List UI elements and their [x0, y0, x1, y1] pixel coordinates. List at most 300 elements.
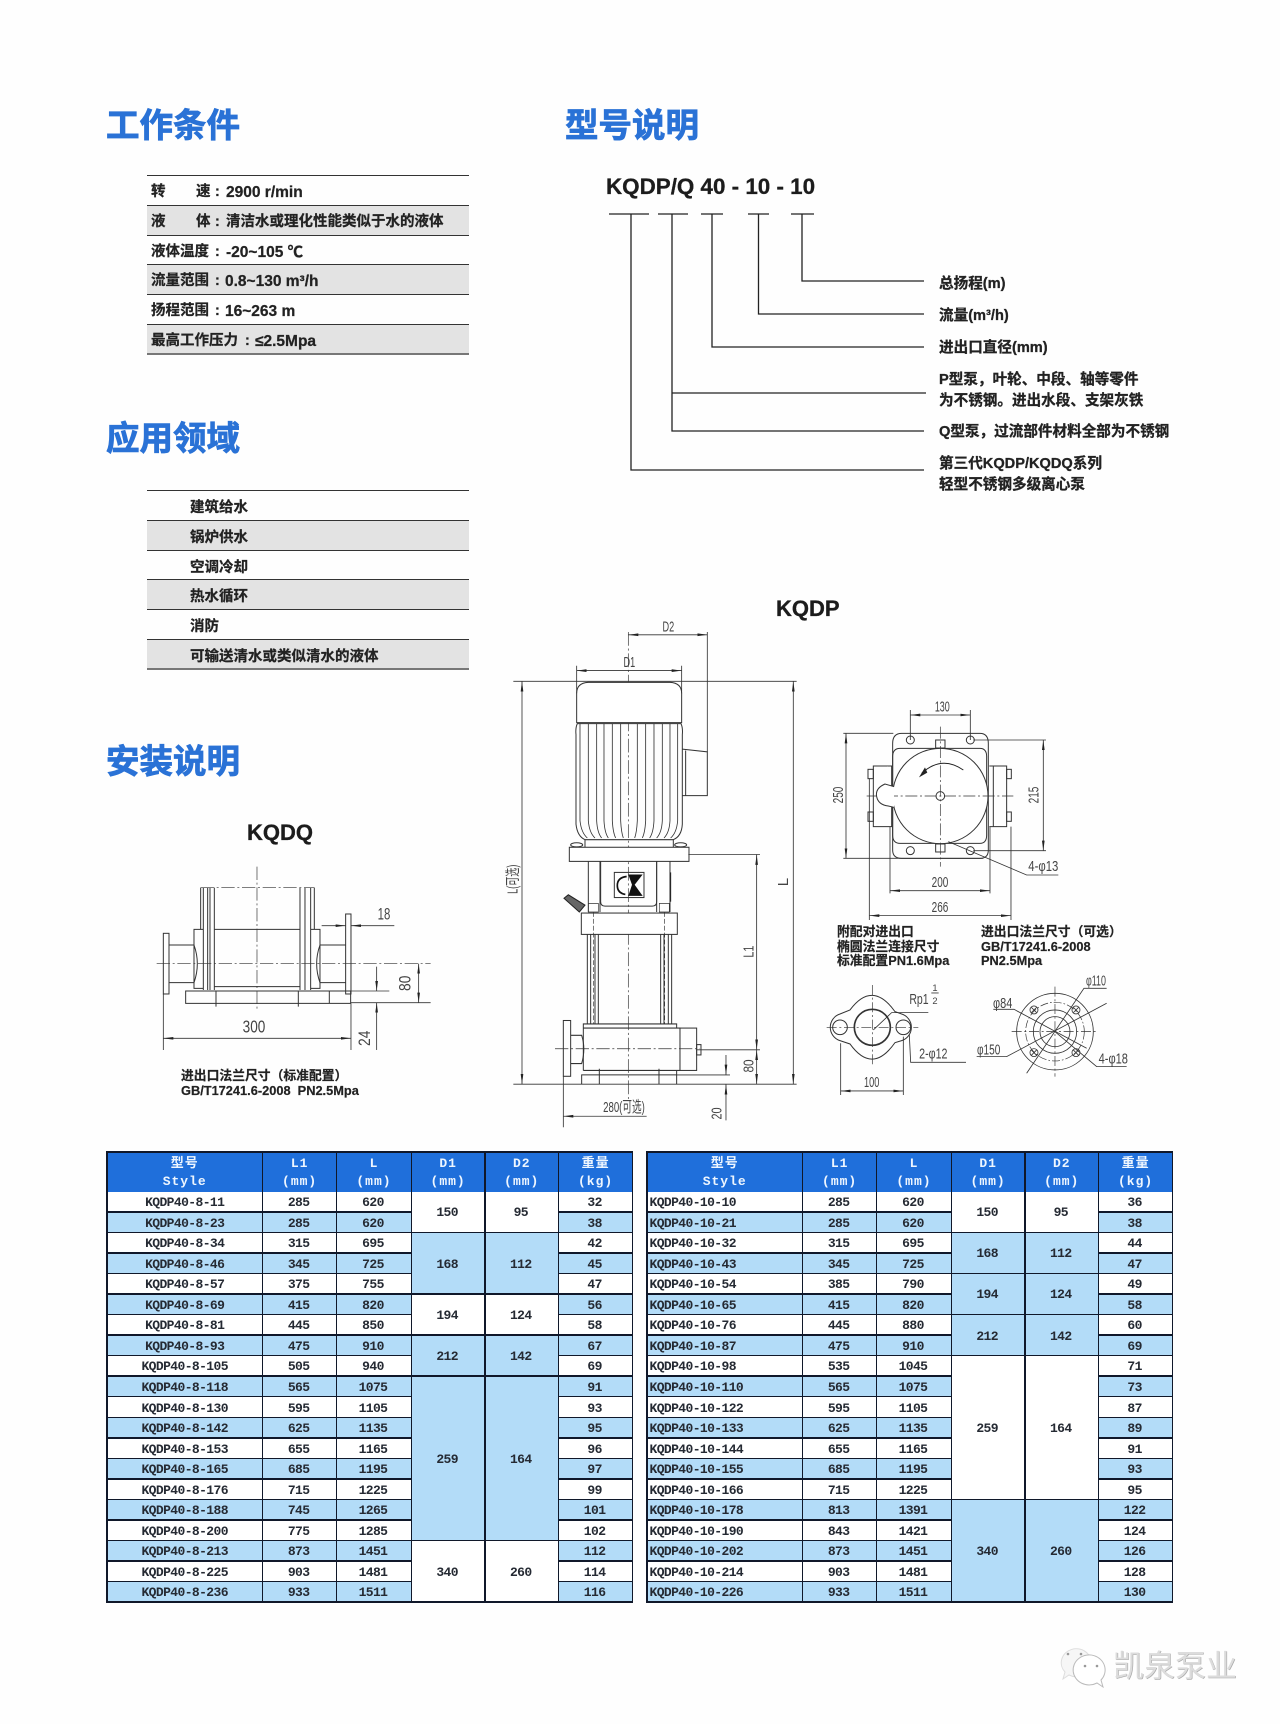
round flange text	[977, 973, 1128, 1068]
dimension lines	[513, 632, 797, 1127]
table body: 42	[587, 1236, 602, 1251]
heading: installation: 安装说明	[106, 744, 240, 781]
table body: 565	[828, 1380, 849, 1395]
table body: 535	[828, 1359, 849, 1374]
table body: KQDP40-8-57	[145, 1277, 224, 1292]
panel: working conditions list: ≤2.5Mpa	[255, 333, 316, 350]
table body: 715	[828, 1483, 849, 1498]
round flange text: φ84	[993, 996, 1012, 1012]
table body: KQDP40-8-130	[141, 1401, 228, 1416]
table header: L1	[831, 1156, 848, 1170]
table body: KQDP40-8-46	[145, 1257, 224, 1272]
table body: 128	[1124, 1565, 1145, 1580]
table body: KQDP40-8-200	[141, 1524, 228, 1539]
label: series description: 轻型不锈钢多级离心泵	[939, 477, 1085, 493]
panel: working conditions list: 转	[151, 184, 166, 200]
table body: 1165	[899, 1442, 927, 1457]
table header: (mm)	[1044, 1174, 1079, 1188]
table body: 345	[288, 1257, 309, 1272]
panel: working conditions list: 液	[151, 214, 166, 230]
table body: KQDP40-10-98	[650, 1359, 736, 1374]
watermark text: 凯泉泵业	[1113, 1649, 1237, 1684]
KQDQ dimension text: 24	[355, 1031, 374, 1046]
table body: 32	[587, 1195, 602, 1210]
table body: 655	[828, 1442, 849, 1457]
table body: 112	[1050, 1246, 1072, 1261]
table body: 116	[584, 1585, 605, 1600]
table body: KQDP40-8-225	[141, 1565, 228, 1580]
table body: 142	[1050, 1329, 1072, 1344]
table body: 124	[1124, 1524, 1145, 1539]
table body: 790	[902, 1277, 924, 1292]
table body: 45	[587, 1257, 602, 1272]
table body: 775	[288, 1524, 309, 1539]
table body: 725	[362, 1257, 384, 1272]
panel: working conditions list: :	[215, 214, 220, 230]
table header: (kg)	[578, 1174, 613, 1188]
oval flange text	[864, 983, 947, 1091]
table body: 725	[902, 1257, 924, 1272]
icon: wechat bubbles watermark	[1061, 1649, 1105, 1687]
oval flange text: 2	[932, 996, 938, 1006]
KQDQ dimension text	[243, 904, 415, 1046]
table body: KQDP40-10-110	[650, 1380, 743, 1395]
table body: 1451	[899, 1544, 927, 1559]
table body: 150	[436, 1205, 458, 1220]
table body: KQDP40-8-213	[141, 1544, 228, 1559]
round flange text: 4-φ18	[1099, 1052, 1128, 1068]
table body: 95	[1127, 1483, 1142, 1498]
plan view dimension text: 130	[935, 699, 950, 715]
table body: 285	[828, 1216, 849, 1231]
table body: 69	[1127, 1339, 1142, 1354]
KQDQ body	[157, 867, 431, 1010]
note: KQDQ flange: 进出口法兰尺寸（标准配置）	[181, 1068, 347, 1083]
panel: working conditions list: :	[215, 303, 220, 319]
label: P type pump	[939, 370, 1144, 409]
oval flange text: 2-φ12	[919, 1046, 947, 1062]
table body: 124	[510, 1308, 532, 1323]
panel: working conditions list: 体	[196, 214, 210, 230]
plan view dimension text: 215	[1027, 787, 1043, 803]
note: flange optional: PN2.5Mpa	[981, 953, 1042, 968]
table body: 1225	[359, 1483, 387, 1498]
table header: Style	[703, 1174, 747, 1188]
oval flange text: 100	[864, 1075, 879, 1091]
plan view dimension text: 4-φ13	[1028, 859, 1058, 875]
table body: 903	[828, 1565, 849, 1580]
dimension text: D2	[662, 619, 674, 635]
table body: 1481	[359, 1565, 387, 1580]
table body: 933	[288, 1585, 309, 1600]
panel: working conditions list: :	[245, 333, 250, 349]
label: series description: 第三代KQDP/KQDQ系列	[939, 456, 1102, 472]
plan view dimension text	[831, 699, 1058, 916]
table body: 47	[587, 1277, 602, 1292]
oval flange	[827, 985, 966, 1095]
table: KQDP40-8 series	[106, 1151, 633, 1603]
table body: 1045	[899, 1359, 927, 1374]
table body: 130	[1124, 1585, 1145, 1600]
panel: application fields list: 热水循环	[190, 589, 248, 605]
table body: 415	[828, 1298, 849, 1313]
table body: 813	[828, 1503, 849, 1518]
panel: working conditions list: :	[215, 184, 220, 200]
note: flange oval	[837, 924, 950, 968]
table body: 695	[362, 1236, 384, 1251]
table body: KQDP40-8-165	[141, 1462, 228, 1477]
panel: application fields list: 空调冷却	[190, 560, 248, 576]
table body	[106, 1192, 633, 1603]
table body: 415	[288, 1298, 309, 1313]
model code bracket diagram	[609, 214, 926, 470]
table body: 620	[902, 1216, 924, 1231]
note: flange optional: GB/T17241.6-2008	[981, 938, 1091, 954]
table body: 260	[1050, 1544, 1072, 1559]
table body: 60	[1127, 1318, 1142, 1333]
table body: 475	[288, 1339, 309, 1354]
panel: application fields list: 消防	[190, 619, 219, 635]
table body: KQDP40-8-188	[141, 1503, 228, 1518]
panel: working conditions list	[147, 175, 469, 355]
table body: 285	[288, 1195, 309, 1210]
table body: KQDP40-10-87	[650, 1339, 736, 1354]
table body: 91	[1127, 1442, 1142, 1457]
table header: Style	[163, 1174, 207, 1188]
table header: (mm)	[504, 1174, 539, 1188]
table body: 36	[1127, 1195, 1142, 1210]
table header: (mm)	[282, 1174, 317, 1188]
table body: 102	[584, 1524, 605, 1539]
heading: working conditions: 工作条件	[106, 108, 240, 145]
label: inlet outlet diameter: 进出口直径(mm)	[939, 340, 1048, 356]
table body: 1511	[899, 1585, 927, 1600]
table body: KQDP40-10-155	[650, 1462, 743, 1477]
panel: application fields list: 建筑给水	[190, 500, 248, 516]
dimension text: 280(可选)	[603, 1099, 645, 1116]
motor	[576, 682, 707, 840]
table body: 655	[288, 1442, 309, 1457]
note: flange optional: 进出口法兰尺寸（可选）	[981, 924, 1122, 939]
panel: working conditions list: 扬程范围	[151, 303, 209, 319]
table body: 715	[288, 1483, 309, 1498]
table body: 1265	[359, 1503, 387, 1518]
table body	[646, 1192, 1173, 1603]
table body: 91	[587, 1380, 602, 1395]
table body: KQDP40-10-202	[650, 1544, 743, 1559]
table body: 44	[1127, 1236, 1142, 1251]
table body: 97	[587, 1462, 602, 1477]
table body: 850	[362, 1318, 384, 1333]
panel: working conditions list: 2900 r/min	[226, 184, 303, 201]
table body: 87	[1127, 1401, 1142, 1416]
dimension text: 80	[742, 1059, 757, 1073]
table body: 1075	[899, 1380, 927, 1395]
heading: application fields: 应用领域	[106, 421, 240, 458]
plan view dimension text: 266	[932, 900, 948, 916]
table body: 695	[902, 1236, 924, 1251]
table body: KQDP40-10-178	[650, 1503, 743, 1518]
panel: working conditions list: 16~263 m	[225, 303, 295, 320]
table body: 122	[1124, 1503, 1145, 1518]
table body: 38	[587, 1216, 602, 1231]
panel: application fields list: 锅炉供水	[190, 530, 248, 546]
table header	[646, 1151, 1173, 1193]
panel: working conditions list: 清洁水或理化性能类似于水的液体	[226, 214, 444, 230]
table body: 940	[362, 1359, 384, 1374]
table body: 1481	[899, 1565, 927, 1580]
table body: 340	[436, 1565, 458, 1580]
panel: working conditions list: :	[215, 273, 220, 289]
panel: application fields list	[147, 490, 469, 670]
table body: KQDP40-10-190	[650, 1524, 743, 1539]
table body: 1135	[359, 1421, 387, 1436]
table header: (mm)	[971, 1174, 1006, 1188]
table body: KQDP40-8-81	[145, 1318, 224, 1333]
plan view dimension text: 250	[831, 787, 847, 803]
table body: 212	[976, 1329, 998, 1344]
table body: 340	[976, 1544, 998, 1559]
dimension text	[505, 619, 792, 1120]
panel: working conditions list: -20~105 ℃	[226, 244, 303, 261]
table body: 93	[1127, 1462, 1142, 1477]
dimension text: L	[776, 878, 792, 886]
label: series description	[939, 454, 1102, 493]
table body: KQDP40-8-69	[145, 1298, 224, 1313]
table body: 625	[288, 1421, 309, 1436]
label: flow: 流量(m³/h)	[939, 308, 1009, 324]
panel: working conditions list: 0.8~130 m³/h	[225, 273, 318, 290]
table body: KQDP40-10-226	[650, 1585, 743, 1600]
round flange text: φ150	[977, 1043, 1000, 1059]
table: KQDP40-10 series	[646, 1151, 1173, 1603]
table body: 1105	[899, 1401, 927, 1416]
table body: KQDP40-10-21	[650, 1216, 736, 1231]
table body: 164	[510, 1452, 532, 1467]
table body: KQDP40-10-10	[650, 1195, 736, 1210]
table body: 259	[436, 1452, 458, 1467]
table body: 1165	[359, 1442, 387, 1457]
table body: 285	[288, 1216, 309, 1231]
table body: KQDP40-8-142	[141, 1421, 228, 1436]
table body: KQDP40-8-93	[145, 1339, 224, 1354]
label: KQDQ: KQDQ	[247, 820, 313, 845]
table body: 114	[584, 1565, 605, 1580]
table body: KQDP40-8-23	[145, 1216, 224, 1231]
panel: application fields list: 可输送清水或类似清水的液体	[190, 649, 378, 665]
table header: 型号	[711, 1156, 739, 1170]
table body: 903	[288, 1565, 309, 1580]
note: flange optional	[981, 924, 1122, 968]
table header: D2	[1053, 1156, 1071, 1170]
table body: 625	[828, 1421, 849, 1436]
table body: 71	[1127, 1359, 1142, 1374]
table body: 385	[828, 1277, 849, 1292]
table header	[106, 1151, 633, 1193]
table body: KQDP40-8-236	[141, 1585, 228, 1600]
table body: KQDP40-10-166	[650, 1483, 743, 1498]
oval flange text: Rp1	[909, 992, 929, 1008]
table body: 1285	[359, 1524, 387, 1539]
table body: 96	[587, 1442, 602, 1457]
table body: 112	[584, 1544, 605, 1559]
label: Q type pump: Q型泵，过流部件材料全部为不锈钢	[939, 424, 1169, 440]
table body: 126	[1124, 1544, 1145, 1559]
table body: 1195	[359, 1462, 387, 1477]
pump plan view	[867, 727, 1013, 867]
table body: 565	[288, 1380, 309, 1395]
table header: D1	[439, 1156, 457, 1170]
table body: 150	[976, 1205, 998, 1220]
table header: 型号	[171, 1156, 199, 1170]
table body: 595	[288, 1401, 309, 1416]
table body: KQDP40-8-176	[141, 1483, 228, 1498]
table header: 重量	[1122, 1156, 1150, 1170]
table body: 345	[828, 1257, 849, 1272]
plan view dimensions	[843, 710, 1058, 920]
table body: 194	[976, 1287, 998, 1302]
label: P type pump: P型泵，叶轮、中段、轴等零件	[939, 372, 1138, 388]
table body: 315	[828, 1236, 849, 1251]
table body: 880	[902, 1318, 924, 1333]
table body: 873	[288, 1544, 309, 1559]
table body: 58	[1127, 1298, 1142, 1313]
table header: D1	[979, 1156, 997, 1170]
table header: D2	[513, 1156, 531, 1170]
note: flange oval: 椭圆法兰连接尺寸	[837, 938, 939, 954]
pump elevation drawing	[505, 619, 797, 1127]
table body: KQDP40-8-153	[141, 1442, 228, 1457]
table header: L	[910, 1156, 918, 1170]
table body: 260	[510, 1565, 532, 1580]
table body: 95	[1054, 1205, 1068, 1220]
middle stage and tubes	[581, 912, 677, 1024]
dimension text: 20	[710, 1107, 726, 1120]
label: total head: 总扬程(m)	[939, 276, 1005, 292]
table body: 685	[288, 1462, 309, 1477]
note: KQDQ flange	[181, 1068, 360, 1098]
table body: 1451	[359, 1544, 387, 1559]
KQDQ dimension text: 300	[243, 1017, 265, 1037]
table body: 69	[587, 1359, 602, 1374]
table body: 95	[587, 1421, 602, 1436]
KQDQ dimension text: 80	[396, 976, 415, 991]
table body: KQDP40-8-11	[145, 1195, 224, 1210]
table header: (mm)	[356, 1174, 392, 1188]
heading: model explanation: 型号说明	[565, 108, 699, 145]
table body: KQDP40-8-105	[141, 1359, 228, 1374]
panel: working conditions list: :	[215, 244, 220, 260]
panel: working conditions list: 最高工作压力	[151, 333, 238, 349]
table body: 67	[587, 1339, 602, 1354]
table body: 910	[362, 1339, 384, 1354]
note: flange oval: 附配对进出口	[837, 924, 914, 939]
table body: 89	[1127, 1421, 1142, 1436]
table body: 112	[510, 1257, 532, 1272]
table body: 73	[1127, 1380, 1142, 1395]
table body: 820	[362, 1298, 384, 1313]
table body: 47	[1127, 1257, 1142, 1272]
table body: 620	[362, 1216, 384, 1231]
table body: 1391	[899, 1503, 927, 1518]
table body: KQDP40-10-122	[650, 1401, 743, 1416]
pump base	[555, 1020, 701, 1084]
table header: L1	[291, 1156, 308, 1170]
table body: 755	[362, 1277, 384, 1292]
table header: (mm)	[431, 1174, 466, 1188]
table body: KQDP40-10-43	[650, 1257, 736, 1272]
table body: KQDP40-8-34	[145, 1236, 224, 1251]
table body: 933	[828, 1585, 849, 1600]
table body: 124	[1050, 1287, 1072, 1302]
table body: KQDP40-10-76	[650, 1318, 736, 1333]
table body: 595	[828, 1401, 849, 1416]
panel: working conditions list: 速	[196, 184, 210, 200]
table body: 820	[902, 1298, 924, 1313]
table body: KQDP40-10-144	[650, 1442, 743, 1457]
table body: KQDP40-10-32	[650, 1236, 736, 1251]
table body: 620	[902, 1195, 924, 1210]
table body: 843	[828, 1524, 849, 1539]
table body: 1105	[359, 1401, 387, 1416]
table body: 873	[828, 1544, 849, 1559]
table header: (mm)	[822, 1174, 857, 1188]
table body: 910	[902, 1339, 924, 1354]
table body: KQDP40-10-133	[650, 1421, 743, 1436]
table body: 745	[288, 1503, 309, 1518]
table body: 1225	[899, 1483, 927, 1498]
table body: KQDP40-10-65	[650, 1298, 736, 1313]
note: KQDQ flange: GB/T17241.6-2008 PN2.5Mpa	[181, 1082, 359, 1098]
table body: 95	[514, 1205, 528, 1220]
table body: 1075	[359, 1380, 387, 1395]
plan view dimension text: 200	[932, 875, 948, 891]
label: P type pump: 为不锈钢。进出水段、支架灰铁	[939, 393, 1143, 409]
table body: 49	[1127, 1277, 1142, 1292]
table body: 38	[1127, 1216, 1142, 1231]
dimension text: D1	[623, 655, 635, 671]
table body: 56	[587, 1298, 602, 1313]
table body: 101	[584, 1503, 605, 1518]
oval flange text: 1	[932, 983, 938, 993]
dimension text: L1	[742, 946, 757, 958]
KQDQ base drawing	[157, 867, 431, 1050]
table body: KQDP40-10-54	[650, 1277, 736, 1292]
table body: 1421	[899, 1524, 927, 1539]
panel: working conditions list: 液体温度	[151, 244, 209, 260]
table body: 164	[1050, 1421, 1072, 1436]
table body: 685	[828, 1462, 849, 1477]
table body: 168	[436, 1257, 458, 1272]
table header: (kg)	[1118, 1174, 1153, 1188]
note: flange oval: 标准配置PN1.6Mpa	[837, 953, 949, 968]
table body: 93	[587, 1401, 602, 1416]
table body: 168	[976, 1246, 998, 1261]
table header: 重量	[582, 1156, 610, 1170]
table body: 212	[436, 1349, 458, 1364]
panel: working conditions list: 流量范围	[151, 273, 209, 289]
table header: L	[370, 1156, 378, 1170]
table body: KQDP40-8-118	[141, 1380, 228, 1395]
bracket and logo	[564, 840, 689, 912]
table body: 445	[288, 1318, 309, 1333]
table body: 1135	[899, 1421, 927, 1436]
table body: 445	[828, 1318, 849, 1333]
table body: 1195	[899, 1462, 927, 1477]
table body: 58	[587, 1318, 602, 1333]
table body: KQDP40-10-214	[650, 1565, 743, 1580]
table body: 194	[436, 1308, 458, 1323]
